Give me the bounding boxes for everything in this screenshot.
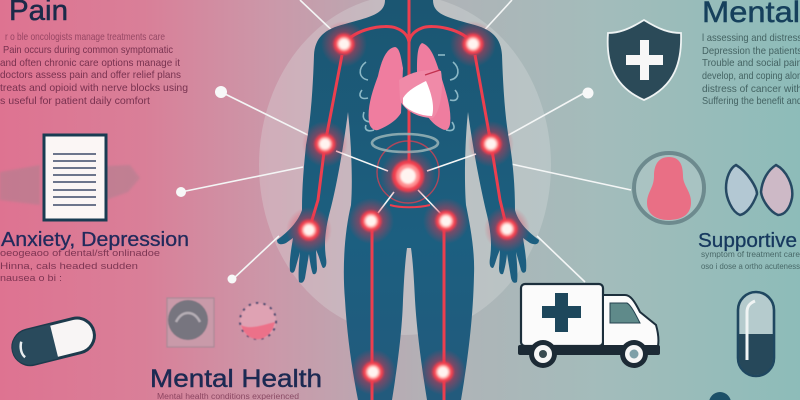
icon: ambulance — [518, 284, 660, 368]
heading: Anxiety, Depression: Anxiety, Depression — [1, 229, 189, 251]
halo behind body — [259, 0, 551, 335]
text block: pain description: s useful for patient daily comfort — [0, 95, 150, 107]
heart vessel — [425, 70, 440, 75]
text block: anxiety description: nausea o bi : — [0, 273, 62, 284]
icon: organ in circle — [634, 153, 704, 223]
text block: pain description: doctors assess pain and offer relief plans — [0, 69, 181, 81]
human body figure — [277, 0, 539, 400]
icon: capsule left — [9, 314, 98, 369]
connector end dots — [176, 86, 594, 284]
text block: pain description: r o ble oncologists manage treatments care — [5, 31, 165, 43]
heart — [399, 70, 442, 118]
text block: pain description: Pain occurs during common symptomatic — [3, 44, 173, 56]
icon: capsule right — [738, 292, 774, 376]
icon: mental health square — [167, 298, 214, 347]
heading: Supportive: Supportive — [698, 230, 797, 252]
icon: paired organs — [726, 165, 792, 215]
icon: document — [0, 135, 140, 220]
joint nodes — [286, 21, 530, 395]
text block: mental description — [702, 32, 800, 107]
icon: partial circle at bottom — [709, 392, 731, 400]
body silhouette — [277, 0, 539, 400]
heading: Mental Health: Mental Health — [150, 365, 322, 393]
icon: mental health gear — [240, 303, 276, 339]
lungs — [369, 47, 403, 130]
text block: supportive description — [701, 249, 800, 271]
text block: pain description: and often chronic care options manage it — [0, 57, 180, 69]
text block: anxiety description: oeogeaoo of dental/sft onlinadoe — [0, 248, 160, 259]
text block: anxiety description: Hinna, cals headed sudden — [0, 261, 138, 272]
text block: pain description — [0, 31, 188, 107]
ribs — [360, 55, 458, 152]
text block: pain description: treats and opioid with nerve blocks using — [0, 82, 188, 94]
arteries — [309, 0, 507, 400]
text block: supportive description: symptom of treatment care — [701, 249, 800, 259]
connector lines — [181, 0, 631, 282]
text block: anxiety description — [0, 248, 160, 284]
inner connector lines — [336, 151, 476, 215]
icon: shield — [608, 20, 681, 100]
heart highlight — [403, 81, 433, 116]
